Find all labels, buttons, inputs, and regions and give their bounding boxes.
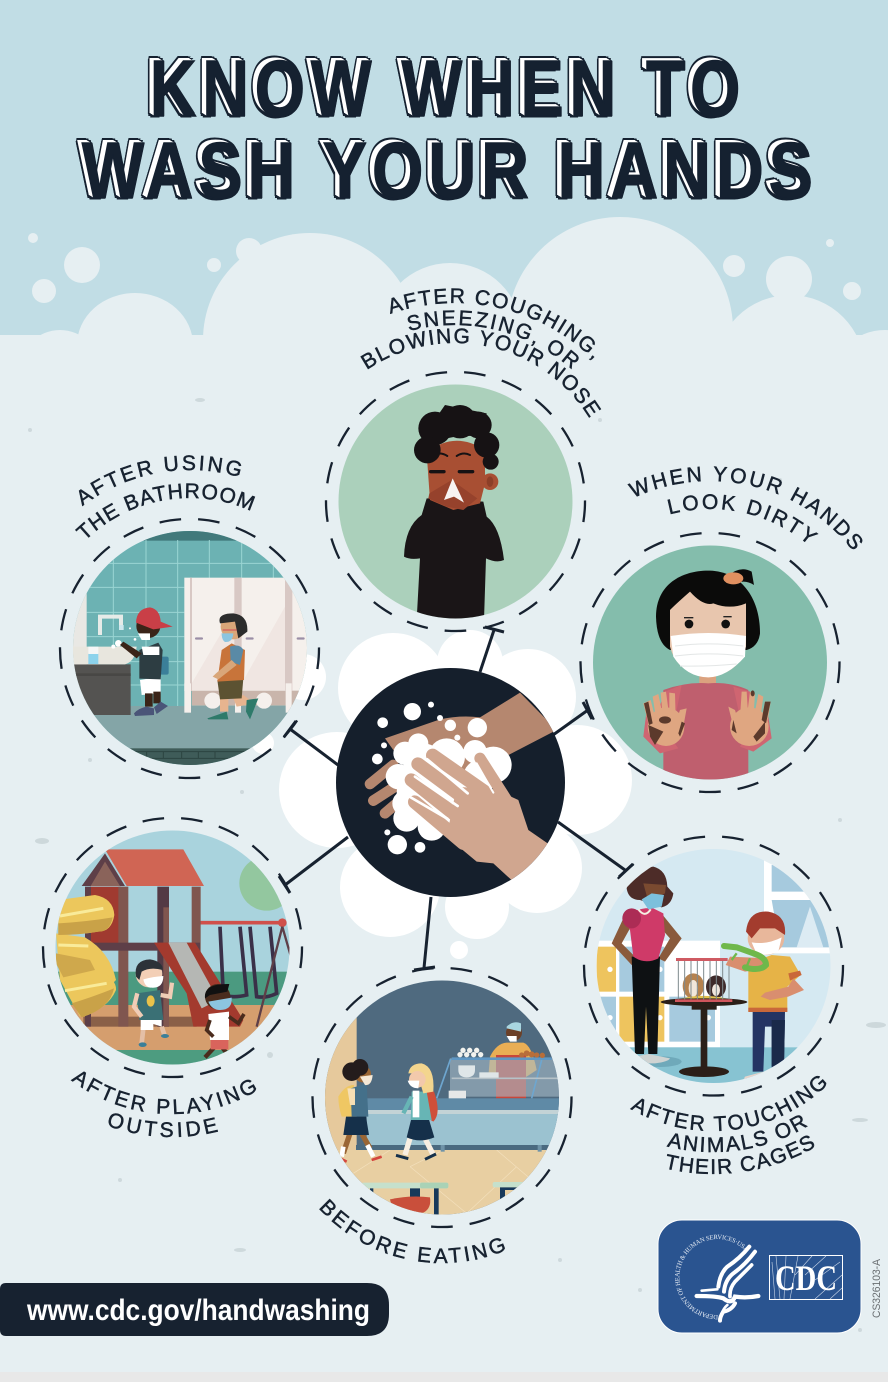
dashed ring <box>576 828 851 1104</box>
connector lines <box>279 627 633 970</box>
playground illustration <box>53 828 297 1070</box>
dashed ring <box>52 511 327 786</box>
label: when your hands look dirty: LOOK DIRTY <box>667 494 818 542</box>
panel: after coughing sneezing or blowing your nose <box>324 288 602 632</box>
label: after coughing sneezing or blowing your nose: SNEEZING, OR <box>408 310 579 370</box>
window <box>764 860 831 953</box>
HHS eagle icon <box>697 1247 758 1321</box>
label: after touching animals or their cages: AFTER TOUCHING <box>630 1076 826 1132</box>
girl with yellow backpack <box>343 1133 370 1153</box>
cafeteria illustration <box>323 978 563 1218</box>
boy <box>753 1012 785 1073</box>
dashed ring <box>572 525 848 800</box>
table <box>362 1183 448 1188</box>
panel: after playing outside <box>42 817 304 1138</box>
panel: after using the bathroom <box>58 455 320 780</box>
counter <box>367 1098 560 1110</box>
CDC mark: CDC <box>775 1258 837 1298</box>
soap bubbles in sky <box>28 233 861 303</box>
kid in orange vest <box>207 613 258 719</box>
bottom page strip <box>0 1372 888 1382</box>
sneeze guard <box>450 1058 560 1097</box>
cabinets <box>593 941 720 1047</box>
table and cage <box>701 1005 707 1068</box>
label: after using the bathroom: AFTER USING <box>78 455 242 506</box>
title: KNOW WHEN TO <box>150 44 746 133</box>
panel: when your hands look dirty <box>579 466 862 794</box>
document code: CS326103-A <box>871 1258 883 1318</box>
stalls <box>184 578 311 691</box>
label: after touching animals or their cages <box>630 1076 826 1174</box>
label: after coughing sneezing or blowing your nose: AFTER COUGHING, <box>390 288 595 360</box>
website pill: www.cdc.gov/handwashing <box>26 1294 370 1327</box>
bathroom illustration <box>70 530 311 770</box>
website pill <box>0 1283 389 1336</box>
girl with red backpack <box>426 1092 438 1122</box>
left muddy hand <box>643 692 687 746</box>
woman <box>612 912 682 965</box>
label: after playing outside: AFTER PLAYING <box>70 1071 256 1114</box>
label: after using the bathroom: THE BATHROOM <box>75 483 256 538</box>
CDC and HHS logo badge <box>658 1220 862 1334</box>
worker <box>488 1043 537 1077</box>
kid two <box>205 1047 227 1057</box>
iguana <box>724 946 766 969</box>
HHS seal text: DEPARTMENT OF HEALTH & HUMAN SERVICES·USA <box>675 1234 746 1320</box>
panel: before eating <box>311 967 573 1264</box>
foam <box>372 702 512 854</box>
slide <box>154 943 243 1027</box>
right muddy hand <box>728 692 771 746</box>
front hand <box>411 755 507 843</box>
yellow tube slide <box>56 895 116 1017</box>
label: after playing outside <box>70 1071 256 1138</box>
kid with cap <box>120 607 173 716</box>
label: before eating: BEFORE EATING <box>319 1198 505 1264</box>
white soap cloud behind hands <box>252 630 632 959</box>
back hand <box>370 693 557 813</box>
dirty hands illustration <box>592 545 828 781</box>
title: WASH YOUR HANDS <box>82 126 818 215</box>
pets illustration <box>593 848 835 1091</box>
title <box>76 44 818 215</box>
label: after touching animals or their cages: ANIMALS OR <box>666 1115 808 1152</box>
label: when your hands look dirty: WHEN YOUR HANDS <box>627 466 862 550</box>
sink <box>70 664 131 715</box>
dashed ring <box>318 364 593 639</box>
label: after coughing sneezing or blowing your nose: BLOWING YOUR NOSE <box>360 328 602 418</box>
label: after touching animals or their cages: THEIR CAGES <box>666 1136 814 1174</box>
label: after coughing sneezing or blowing your nose <box>360 288 602 418</box>
dashed ring <box>304 960 580 1235</box>
label: after playing outside: OUTSIDE <box>108 1113 218 1138</box>
icon: washing hands <box>330 663 570 903</box>
kid one <box>142 1027 165 1043</box>
dashed ring <box>35 810 310 1085</box>
coughing illustration <box>338 384 573 620</box>
label: after using the bathroom <box>75 455 256 538</box>
panel: after touching animals or their cages <box>582 836 844 1174</box>
